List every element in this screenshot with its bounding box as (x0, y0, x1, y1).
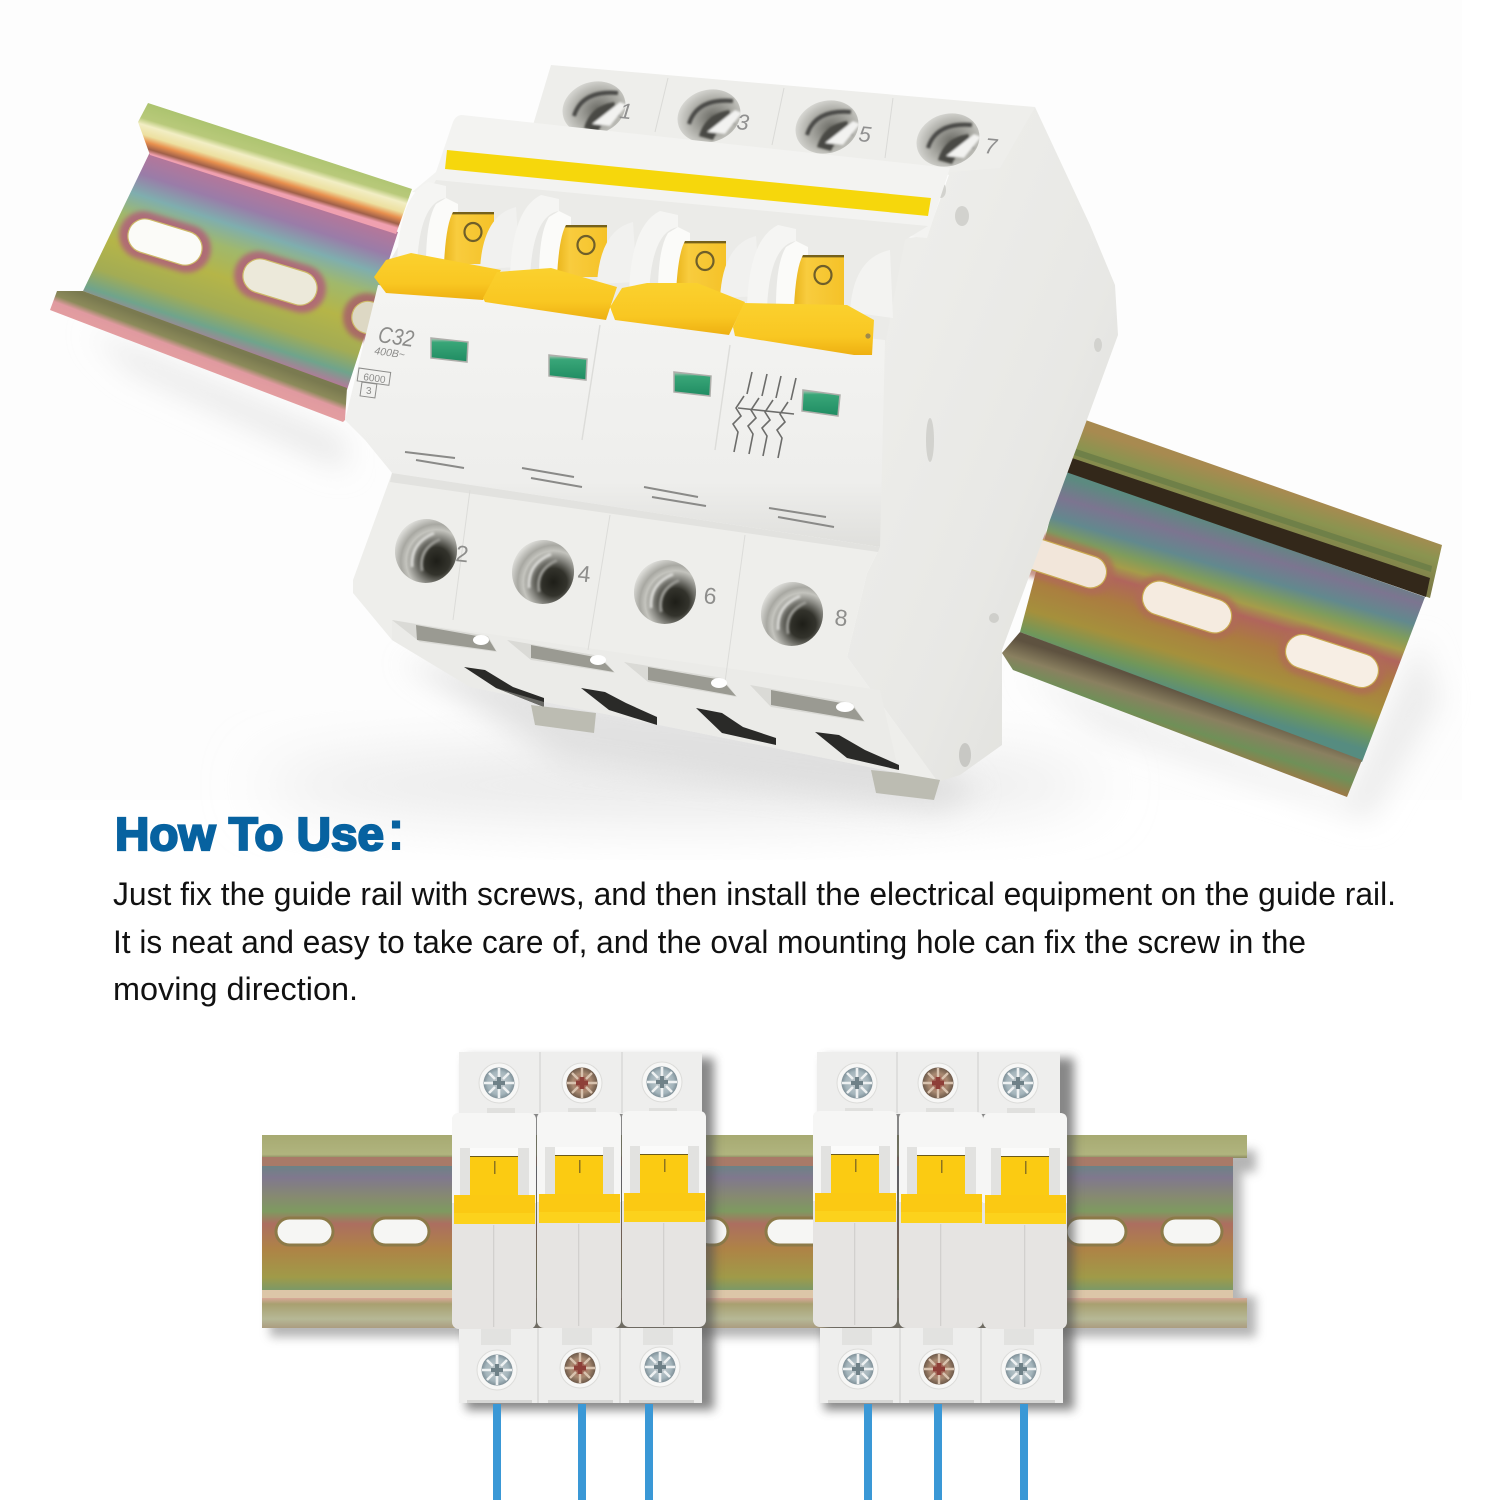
rail shadow (270, 1150, 1256, 1337)
lower slots (464, 667, 899, 770)
left din rail (50, 103, 422, 470)
body text: moving direction. (113, 971, 358, 1007)
background shading (0, 0, 1462, 819)
back terminal block (533, 65, 1035, 175)
lower din rail photo (262, 1135, 1256, 1337)
mounting feet (531, 705, 940, 800)
oval holes (276, 1218, 1222, 1245)
lower terminal block: 8 (833, 604, 849, 631)
rating label: C32 (377, 322, 416, 352)
back terminal block: 5 (857, 121, 873, 147)
rail face (83, 152, 398, 390)
lower terminal block: 2 (454, 540, 470, 567)
rating label: 400B~ (374, 345, 406, 361)
rail shadow (90, 330, 345, 470)
module dividers (582, 325, 730, 450)
yellow stripe (445, 150, 931, 216)
breaker shadow (466, 1058, 714, 1410)
rail shadow (1020, 640, 1440, 820)
toggle switches (397, 182, 893, 318)
circuit diagram (733, 372, 796, 458)
oval holes (1005, 525, 1392, 701)
rail bottom flange (1002, 632, 1362, 797)
top front panel (412, 115, 950, 238)
lower breakers right group (813, 1052, 1074, 1410)
rail top flange (138, 103, 412, 234)
body text (113, 876, 1396, 1007)
yellow paddles (374, 253, 874, 355)
lower breakers left group (452, 1052, 714, 1410)
right din rail (1002, 417, 1442, 820)
back terminal block: 3 (735, 109, 751, 135)
body text: Just fix the guide rail with screws, and then install the electrical equipment on the guide rail. (113, 876, 1396, 912)
back terminal block: 1 (618, 98, 633, 124)
large circuit breaker (345, 65, 1118, 810)
blue wires (497, 1404, 1024, 1500)
heading: How To Use (115, 808, 384, 860)
dark groove (1063, 456, 1430, 597)
rating label: 6000 (363, 372, 387, 386)
rail bottom flange (50, 291, 347, 422)
main front panel (345, 285, 885, 547)
lower terminal block (353, 473, 938, 782)
rating label (357, 322, 416, 398)
rating label: 3 (366, 386, 372, 397)
green indicators (431, 338, 840, 416)
back terminal block: 7 (983, 133, 999, 159)
metal clamps (392, 620, 865, 722)
rail top flange (1063, 417, 1442, 598)
terminal holes (389, 513, 463, 589)
breaker floor shadow (400, 660, 980, 810)
rail top flange (262, 1135, 1247, 1158)
terminal screws (477, 1062, 1041, 1390)
breaker shadow (824, 1058, 1074, 1410)
rail face (262, 1158, 1233, 1298)
double line marks (405, 452, 834, 527)
breaker side panel (847, 107, 1118, 782)
lower terminal block: 6 (702, 582, 718, 609)
rail face (1020, 470, 1425, 762)
toggle recess (386, 180, 928, 345)
lower terminal block: 4 (576, 560, 592, 587)
rail bottom flange (262, 1290, 1233, 1300)
oval holes (113, 205, 422, 355)
heading: : (386, 798, 406, 863)
body text: It is neat and easy to take care of, and the oval mounting hole can fix the screw in the (113, 924, 1306, 960)
